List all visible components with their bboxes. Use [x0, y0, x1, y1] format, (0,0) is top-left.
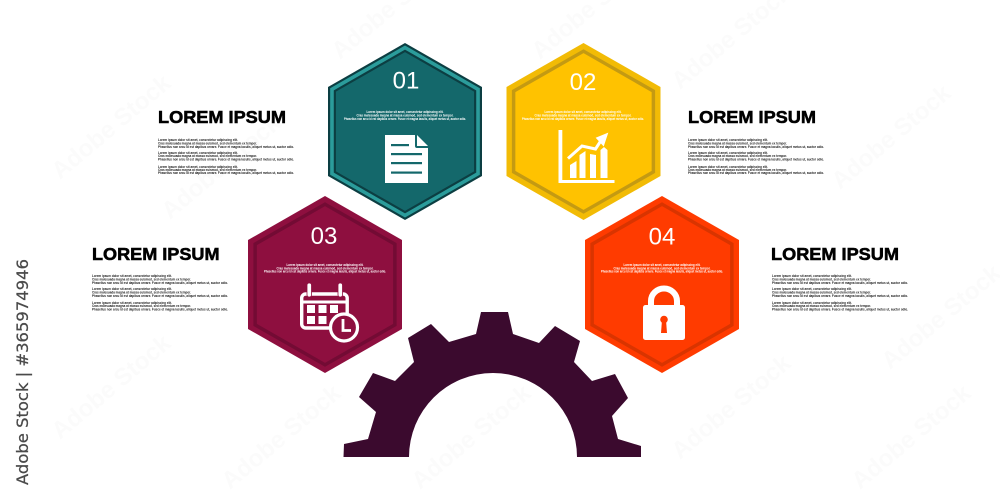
body copy: [158, 138, 294, 175]
hexagon 04 caption: [601, 263, 723, 274]
number 01: 01: [393, 68, 419, 94]
panel: hexagon 04: [585, 196, 739, 373]
body copy: Lorem ipsum dolor sit amet, consectetur adipiscing elit.: [688, 138, 768, 142]
hexagon 04 caption: Phasellus non arcu id est dapibus ornare. Fusce et magna iaculis, aliquet metus ut, auctor odio.: [601, 270, 723, 274]
body copy: Cras malesuada magna at massa euismod, sed elementum ex tempor.: [158, 142, 257, 146]
icon: growth chart: [558, 130, 614, 183]
hexagon 01 caption: Cras malesuada magna at massa euismod, sed elementum ex tempor.: [356, 114, 454, 118]
hexagon 02 caption: [522, 110, 644, 121]
hexagon 01 caption: Phasellus non arcu id est dapibus ornare. Fusce et magna iaculis, aliquet metus ut, auctor odio.: [344, 117, 466, 121]
heading: LOREM IPSUM: [771, 244, 899, 264]
panel: hexagon 01: [328, 43, 482, 220]
body copy: Phasellus non arcu id est dapibus ornare. Fusce et magna iaculis, aliquet metus ut, auctor odio.: [688, 158, 824, 162]
text block: top right: [688, 107, 824, 175]
background watermarks: Adobe Stock: [827, 79, 957, 195]
body copy: Lorem ipsum dolor sit amet, consectetur adipiscing elit.: [158, 151, 238, 155]
hexagon 03 caption: Phasellus non arcu id est dapibus ornare. Fusce et magna iaculis, aliquet metus ut, auctor odio.: [264, 270, 386, 274]
body copy: Lorem ipsum dolor sit amet, consectetur adipiscing elit.: [688, 151, 768, 155]
heading: LOREM IPSUM: [688, 107, 816, 127]
background watermarks: Adobe Stock: [217, 379, 347, 495]
body copy: Cras malesuada magna at massa euismod, sed elementum ex tempor.: [158, 154, 257, 158]
body copy: Phasellus non arcu id est dapibus ornare. Fusce et magna iaculis, aliquet metus ut, auctor odio.: [158, 158, 294, 162]
body copy: Phasellus non arcu id est dapibus ornare. Fusce et magna iaculis, aliquet metus ut, auctor odio.: [158, 145, 294, 149]
hexagon 02 caption: Phasellus non arcu id est dapibus ornare. Fusce et magna iaculis, aliquet metus ut, auctor odio.: [522, 117, 644, 121]
hexagon 03 caption: Lorem ipsum dolor sit amet, consectetur adipiscing elit.: [286, 263, 364, 267]
hexagon 03 caption: Cras malesuada magna at massa euismod, sed elementum ex tempor.: [276, 266, 374, 270]
body copy: Cras malesuada magna at massa euismod, sed elementum ex tempor.: [688, 154, 787, 158]
body copy: Cras malesuada magna at massa euismod, sed elementum ex tempor.: [772, 304, 871, 308]
hexagon 02 caption: Cras malesuada magna at massa euismod, sed elementum ex tempor.: [534, 114, 632, 118]
body copy: Lorem ipsum dolor sit amet, consectetur adipiscing elit.: [92, 274, 172, 278]
number 03: 03: [311, 223, 337, 250]
heading: LOREM IPSUM: [92, 244, 220, 264]
gear: [344, 312, 641, 457]
body copy: Cras malesuada magna at massa euismod, sed elementum ex tempor.: [92, 278, 191, 282]
body copy: Phasellus non arcu id est dapibus ornare. Fusce et magna iaculis, aliquet metus ut, auctor odio.: [158, 171, 294, 175]
body copy: Lorem ipsum dolor sit amet, consectetur adipiscing elit.: [772, 287, 852, 291]
hexagon 03 caption: [264, 263, 386, 274]
body copy: Lorem ipsum dolor sit amet, consectetur adipiscing elit.: [772, 301, 852, 305]
body copy: Cras malesuada magna at massa euismod, sed elementum ex tempor.: [688, 168, 787, 172]
body copy: Phasellus non arcu id est dapibus ornare. Fusce et magna iaculis, aliquet metus ut, auctor odio.: [92, 308, 228, 312]
body copy: Lorem ipsum dolor sit amet, consectetur adipiscing elit.: [158, 138, 238, 142]
vertical stock id text: Adobe Stock | #365974946: [13, 259, 32, 485]
background watermarks: Adobe Stock: [847, 379, 977, 495]
panel: hexagon 02: [506, 43, 660, 220]
number 02: 02: [570, 69, 596, 96]
body copy: [92, 274, 228, 312]
body copy: Lorem ipsum dolor sit amet, consectetur adipiscing elit.: [92, 287, 172, 291]
text block: lower right: [771, 244, 908, 312]
background watermarks: Adobe Stock: [667, 349, 797, 465]
panel: hexagon 03: [248, 196, 402, 373]
body copy: Cras malesuada magna at massa euismod, sed elementum ex tempor.: [92, 304, 191, 308]
body copy: Phasellus non arcu id est dapibus ornare. Fusce et magna iaculis, aliquet metus ut, auctor odio.: [688, 171, 824, 175]
body copy: Cras malesuada magna at massa euismod, sed elementum ex tempor.: [772, 278, 871, 282]
hexagon 01 caption: Lorem ipsum dolor sit amet, consectetur adipiscing elit.: [366, 110, 444, 114]
hexagon 02 caption: Lorem ipsum dolor sit amet, consectetur adipiscing elit.: [544, 110, 622, 114]
icon: calendar with clock: [301, 283, 358, 341]
body copy: [772, 274, 908, 312]
body copy: Phasellus non arcu id est dapibus ornare. Fusce et magna iaculis, aliquet metus ut, auctor odio.: [688, 145, 824, 149]
icon: padlock: [643, 288, 685, 340]
background watermarks: Adobe Stock: [47, 69, 177, 185]
body copy: Phasellus non arcu id est dapibus ornare. Fusce et magna iaculis, aliquet metus ut, auctor odio.: [92, 294, 228, 298]
hexagon 04 caption: Lorem ipsum dolor sit amet, consectetur adipiscing elit.: [624, 263, 701, 267]
body copy: [688, 138, 824, 175]
body copy: Phasellus non arcu id est dapibus ornare. Fusce et magna iaculis, aliquet metus ut, auctor odio.: [772, 308, 908, 312]
body copy: Cras malesuada magna at massa euismod, sed elementum ex tempor.: [772, 290, 871, 294]
body copy: Phasellus non arcu id est dapibus ornare. Fusce et magna iaculis, aliquet metus ut, auctor odio.: [92, 281, 228, 285]
hexagon 04 caption: Cras malesuada magna at massa euismod, sed elementum ex tempor.: [614, 266, 711, 270]
body copy: Cras malesuada magna at massa euismod, sed elementum ex tempor.: [158, 168, 257, 172]
background watermarks: Adobe Stock: [407, 379, 537, 495]
body copy: Cras malesuada magna at massa euismod, sed elementum ex tempor.: [92, 290, 191, 294]
text block: lower left: [92, 244, 228, 312]
body copy: Phasellus non arcu id est dapibus ornare. Fusce et magna iaculis, aliquet metus ut, auctor odio.: [772, 281, 908, 285]
heading: LOREM IPSUM: [158, 107, 286, 127]
hexagon 01 caption: [344, 110, 466, 121]
background watermarks: Adobe Stock: [157, 109, 287, 225]
body copy: Lorem ipsum dolor sit amet, consectetur adipiscing elit.: [92, 301, 172, 305]
background watermarks: Adobe Stock: [47, 329, 177, 445]
body copy: Lorem ipsum dolor sit amet, consectetur adipiscing elit.: [688, 165, 768, 169]
text block: top left: [158, 107, 294, 175]
number 04: 04: [649, 224, 675, 250]
icon: document: [385, 135, 428, 183]
body copy: Lorem ipsum dolor sit amet, consectetur adipiscing elit.: [158, 165, 238, 169]
body copy: Phasellus non arcu id est dapibus ornare. Fusce et magna iaculis, aliquet metus ut, auctor odio.: [772, 294, 908, 298]
body copy: Cras malesuada magna at massa euismod, sed elementum ex tempor.: [688, 142, 787, 146]
body copy: Lorem ipsum dolor sit amet, consectetur adipiscing elit.: [772, 274, 852, 278]
